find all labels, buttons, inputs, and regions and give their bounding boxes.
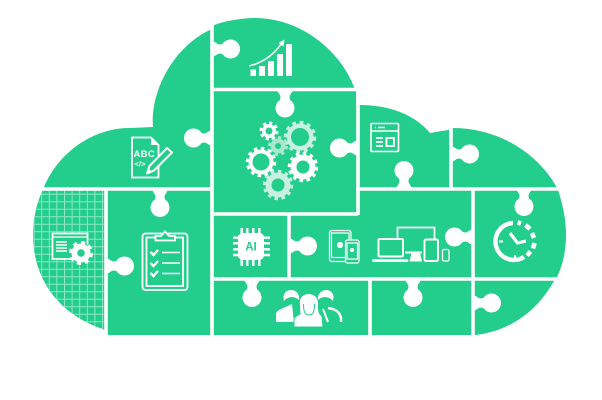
icon: people group (276, 290, 341, 327)
icon: clock (495, 222, 534, 260)
gear: right white (290, 154, 316, 180)
gear: small white (261, 123, 277, 139)
grid panel lines (33, 190, 104, 335)
icon: laptop, monitor, tablet and phone (374, 228, 449, 262)
person: right (318, 290, 334, 301)
puzzle knobs (106, 40, 534, 312)
puzzle gaps (30, 15, 570, 340)
cloud puzzle infographic (33, 18, 566, 335)
icon: AI chip (233, 228, 270, 266)
icon: AI chip: AI (245, 242, 257, 254)
icon: window with settings gear (52, 234, 91, 263)
icon: document with pencil: ABC (134, 149, 155, 160)
cloud silhouette (33, 18, 566, 335)
icon: growth bar chart (249, 40, 292, 76)
icon: tablet and phone (330, 230, 359, 263)
icon: document with pencil (132, 138, 172, 178)
person: left (276, 304, 294, 322)
gear: bottom light (264, 172, 292, 198)
icon: browser window (371, 124, 398, 152)
gear: large light (286, 122, 314, 152)
icon: clipboard checklist (142, 232, 188, 290)
gear: small light (270, 138, 286, 154)
person: center (294, 294, 323, 327)
icon: document with pencil: </> (134, 160, 146, 168)
gear: left white (248, 148, 274, 176)
icon: gears cluster (248, 122, 316, 198)
